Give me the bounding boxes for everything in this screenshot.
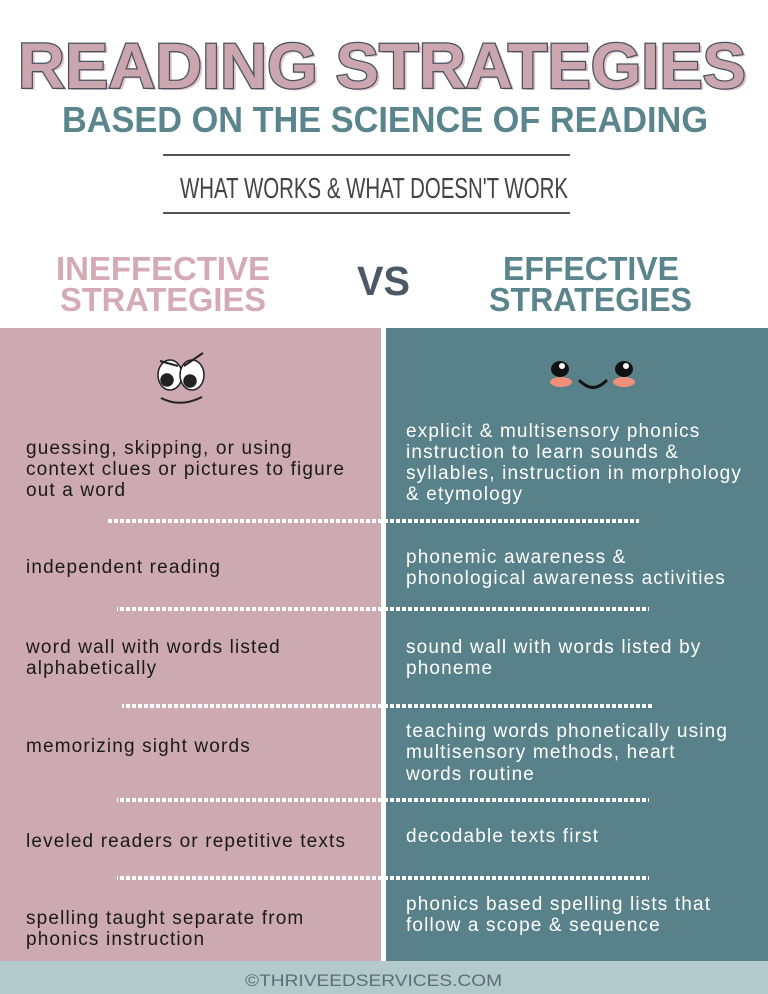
- panel: ineffective: [0, 328, 381, 962]
- text: effective items: explicit & multisensory phonics: [406, 421, 700, 442]
- icon: happy face: [550, 361, 635, 388]
- text: ineffective items: [25, 438, 346, 950]
- subtitle: BASED ON THE SCIENCE OF READING: [62, 99, 708, 140]
- text: ineffective items: guessing, skipping, or using: [26, 438, 293, 459]
- text: effective items: phonological awareness activities: [406, 568, 726, 589]
- text: effective items: phoneme: [406, 658, 493, 679]
- text: effective items: syllables, instruction in morphology: [406, 463, 742, 484]
- text: ineffective items: context clues or pictures to figure: [26, 459, 345, 480]
- heading: ineffective: INEFFECTIVE: [56, 250, 270, 287]
- heading: effective: [489, 250, 692, 318]
- text: effective items: phonemic awareness &: [406, 547, 626, 568]
- title: READING STRATEGIES: [18, 30, 746, 102]
- footer: [0, 961, 768, 994]
- text: effective items: decodable texts first: [406, 826, 599, 847]
- heading: effective: STRATEGIES: [489, 281, 692, 318]
- text: ineffective items: memorizing sight words: [26, 736, 251, 757]
- text: effective items: multisensory methods, heart: [406, 742, 676, 763]
- text: ineffective items: out a word: [26, 480, 126, 501]
- heading: ineffective: STRATEGIES: [60, 281, 266, 318]
- text: ©THRIVEEDSERVICES.COM: [245, 971, 502, 990]
- text: effective items: & etymology: [406, 484, 523, 505]
- text: effective items: instruction to learn sounds &: [406, 442, 679, 463]
- tagline: WHAT WORKS & WHAT DOESN'T WORK: [180, 173, 568, 205]
- heading: vs: VS: [357, 258, 410, 304]
- text: ineffective items: leveled readers or repetitive texts: [26, 831, 346, 852]
- text: effective items: sound wall with words listed by: [406, 637, 701, 658]
- text: ineffective items: word wall with words listed: [25, 637, 281, 658]
- text: ineffective items: independent reading: [26, 557, 221, 578]
- heading: effective: EFFECTIVE: [503, 250, 679, 287]
- heading: ineffective: [56, 250, 270, 318]
- dividers: [107, 519, 654, 880]
- text: ineffective items: spelling taught separate from: [26, 908, 304, 929]
- text: ineffective items: phonics instruction: [26, 929, 205, 950]
- text: effective items: phonics based spelling lists that: [406, 894, 711, 915]
- text: ineffective items: alphabetically: [26, 658, 157, 679]
- icon: grumpy face: [158, 353, 204, 403]
- text: effective items: follow a scope & sequence: [406, 915, 661, 936]
- title: READING STRATEGIES: [21, 32, 749, 104]
- text: effective items: [405, 421, 742, 936]
- panel: effective: [386, 328, 768, 962]
- text: effective items: teaching words phonetically using: [406, 721, 728, 742]
- text: effective items: words routine: [405, 764, 535, 785]
